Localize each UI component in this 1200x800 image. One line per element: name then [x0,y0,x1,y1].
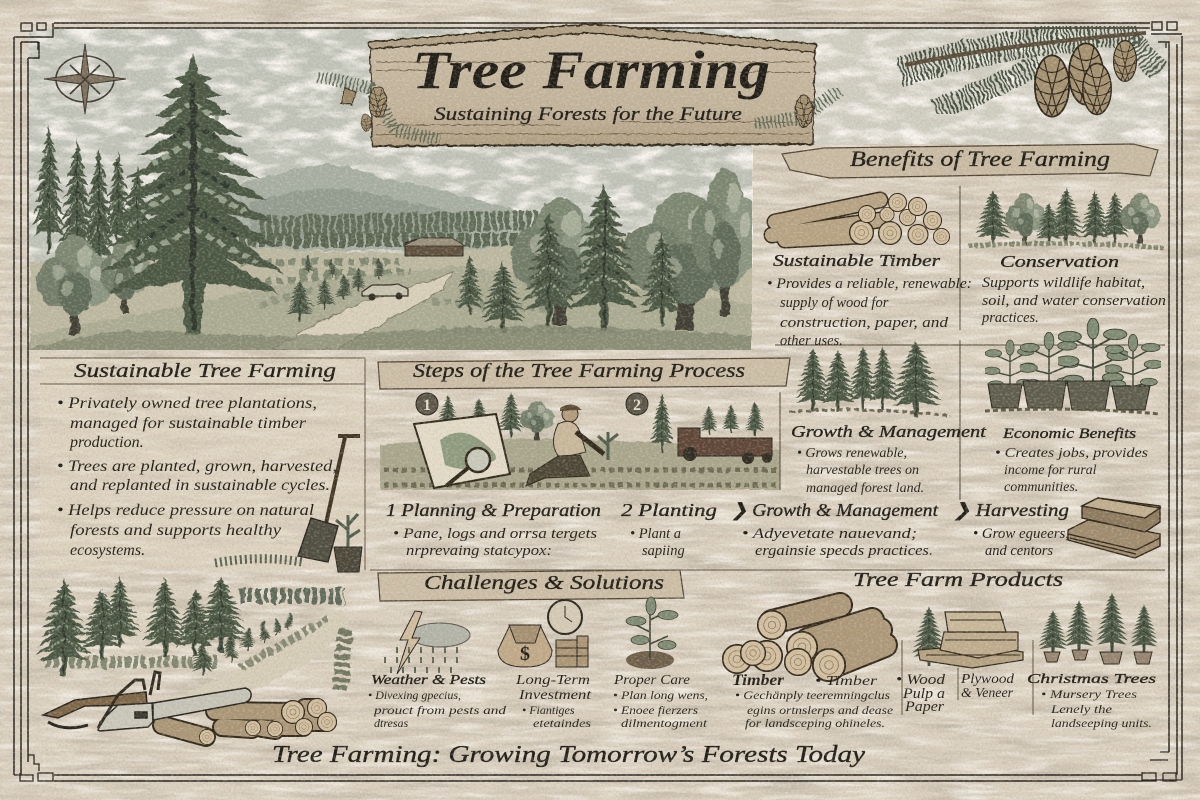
step 4: • Grow egueers, [973,526,1069,542]
product: christmas trees: Christmas Trees [1027,672,1157,687]
icon: stacked lumber boards [1068,498,1160,558]
icon: log stack [772,193,950,245]
challenge: long-term investment [515,673,592,730]
product: timber: • Gechänply teeremningclus [735,688,890,702]
benefit: sustainable timber: supply of wood for [780,295,889,311]
sky over landscape [29,29,1169,274]
foreground scrub [30,326,752,352]
challenge: long-term investment: Investment [518,688,592,703]
benefit: sustainable timber: • Provides a reliable, renewable: [767,276,972,292]
step 3: ergainsie specds practices. [755,543,933,559]
benefit: sustainable timber: other uses. [780,333,843,349]
step 2: sapiing [642,543,685,559]
landscape illustration [30,55,760,352]
icon: money bag and clock [498,600,588,667]
step 1: • Pane, logs and orrsa tergets [393,526,597,542]
subtitle: Sustaining Forests for the Future [434,104,742,125]
benefit: growth and management: harvestable trees on [806,463,919,478]
tractor with trailer [678,428,772,464]
right trees [456,168,760,332]
lower-left forest and chainsaw illustration [36,576,350,745]
step 4: ❯ Harvesting [953,500,1069,521]
panel bullet list: • Privately owned tree plantations, [57,395,317,412]
benefit: conservation: Conservation [1000,252,1119,271]
step numeral badges [416,393,648,415]
chainsaw [43,672,251,731]
panel bullet list: • Trees are planted, grown, harvested, [57,458,337,475]
product: plywood and veneer: & Veneer [961,686,1014,701]
product: wood pulp and paper: • Wood [896,672,946,688]
icon: conservation forest [968,188,1165,248]
panel: tree farm products [723,570,1158,730]
step numeral badges: 2 [633,397,641,414]
challenge: proper care: Proper Care [613,673,690,688]
product: timber: egins ortnslerps and dease [747,703,894,717]
icon: money bag and clock: $ [520,643,530,665]
product: timber: • Timber [815,674,878,689]
large fir tree [100,55,286,335]
step 1 [386,500,601,559]
benefit: growth and management: • Grows renewable, [797,446,907,461]
step numeral badges: 1 [423,397,431,414]
benefit: growth and management [791,422,987,496]
cut logs [162,698,336,745]
step 1: nrprevaing statcypox: [406,543,552,559]
benefit: conservation: soil, and water conservation [982,293,1166,309]
panel bullet list: and replanted in sustainable cycles. [70,477,330,494]
small planted firs [286,254,386,322]
panel: sustainable tree farming [40,358,365,572]
far forest band [240,220,650,240]
benefit: conservation: practices. [981,310,1039,326]
step 2: • Plant a [630,526,681,542]
panel: benefits of tree farming [767,144,1166,500]
step 2: 2 Planting [621,500,717,520]
product: wood pulp and paper [896,672,946,715]
product: timber: Timber [732,672,785,689]
fields [30,226,752,350]
footer tagline: Tree Farming: Growing Tomorrow’s Forests Today [272,742,865,768]
product: christmas trees: Lenely the [1050,702,1113,716]
product: christmas trees: • Mursery Trees [1041,687,1137,701]
panel: challenges and solutions [368,570,1165,730]
step 3 [731,500,939,559]
step 2 [621,500,717,559]
product: wood pulp and paper: Paper [904,699,944,715]
benefit: economic benefits: • Creates jobs, provides [995,446,1149,461]
challenge: weather and pests: Weather & Pests [371,673,487,688]
step 3: ❯ Growth & Management [731,500,939,521]
panel heading: Sustainable Tree Farming [74,360,336,382]
challenge: weather and pests: dtresas [374,716,409,730]
icon: shovel and seedling [215,436,362,572]
icon: storm cloud [384,611,470,674]
icon: potted seedlings [983,318,1163,414]
icon: plywood and pulp [912,606,1023,668]
product: christmas trees [1027,672,1157,730]
challenge: weather and pests: prouct from pests and [373,703,507,717]
panel bullet list: ecosystems. [70,542,145,559]
step 1: 1 Planning & Preparation [386,500,601,520]
benefit: conservation [981,252,1166,326]
products heading: Tree Farm Products [853,570,1063,591]
benefits ribbon [782,144,1158,178]
challenge: weather and pests [368,673,507,730]
compass rose [44,44,126,114]
product: timber [732,672,894,730]
challenge: proper care: • Enoee fierzers [613,703,698,717]
benefit: economic benefits: Economic Benefits [1002,426,1136,442]
steps illustration [380,392,780,490]
product: wood pulp and paper: Pulp a [902,686,945,702]
step 4: and centors [985,543,1053,559]
challenge: proper care: dilmentogment [621,716,708,730]
pine sprig left [318,76,440,140]
mountains [210,165,530,250]
icon: sapling [626,597,678,669]
benefit: sustainable timber: Sustainable Timber [773,251,940,270]
step 4 [953,500,1069,559]
left tree cluster [32,125,156,334]
challenges ribbon [378,570,684,601]
benefit: economic benefits [995,426,1149,495]
panel bullet list: production. [69,434,144,451]
challenge: long-term investment: Long-Term [515,673,590,688]
benefit: growth and management: managed forest land. [806,481,924,496]
kneeling farmer [526,404,618,486]
benefit: economic benefits: communities. [1004,480,1078,495]
panel bullet list: • Helps reduce pressure on natural [57,502,315,519]
panel bullet list: forests and supports healthy [70,522,282,539]
panel bullet list [57,395,337,559]
benefit: sustainable timber: construction, paper, and [780,315,949,331]
product: timber: for landsceping ohineles. [745,716,885,730]
truck on road [362,284,408,300]
title plank [318,24,840,146]
benefits ribbon: Benefits of Tree Farming [850,146,1110,171]
challenges ribbon: Challenges & Solutions [424,572,664,594]
map on clipboard [414,414,510,488]
pine branch with cones [900,30,1160,117]
icon: timber log pile [723,605,885,681]
benefit: sustainable timber [767,251,972,349]
challenge: long-term investment: etetaindes [533,716,591,730]
challenge: weather and pests: • Divexing gpecius, [368,688,461,702]
product: plywood and veneer [960,672,1015,701]
steps ribbon [378,358,790,389]
benefit: conservation: Supports wildlife habitat, [982,275,1145,291]
step 3: • Adyevetate nauevand; [742,526,917,542]
panel bullet list: managed for sustainable timber [70,415,307,432]
challenge: proper care: • Plan long wens, [613,688,708,702]
panel: steps of the tree farming process [378,358,1160,559]
road [272,272,452,350]
steps ribbon: Steps of the Tree Farming Process [413,361,745,382]
benefit: growth and management: Growth & Management [791,422,987,441]
benefit: economic benefits: income for rural [1004,463,1097,478]
product: plywood and veneer: Plywood [960,672,1015,687]
product: christmas trees: landseeping units. [1051,716,1152,730]
icon: christmas trees [1038,592,1158,664]
barn [403,238,465,256]
challenge: long-term investment: • Fiantiges [522,703,575,717]
icon: young firs [790,341,950,417]
pine sprig right [755,90,840,127]
title: Tree Farming [412,40,770,100]
challenge: proper care [613,673,708,730]
